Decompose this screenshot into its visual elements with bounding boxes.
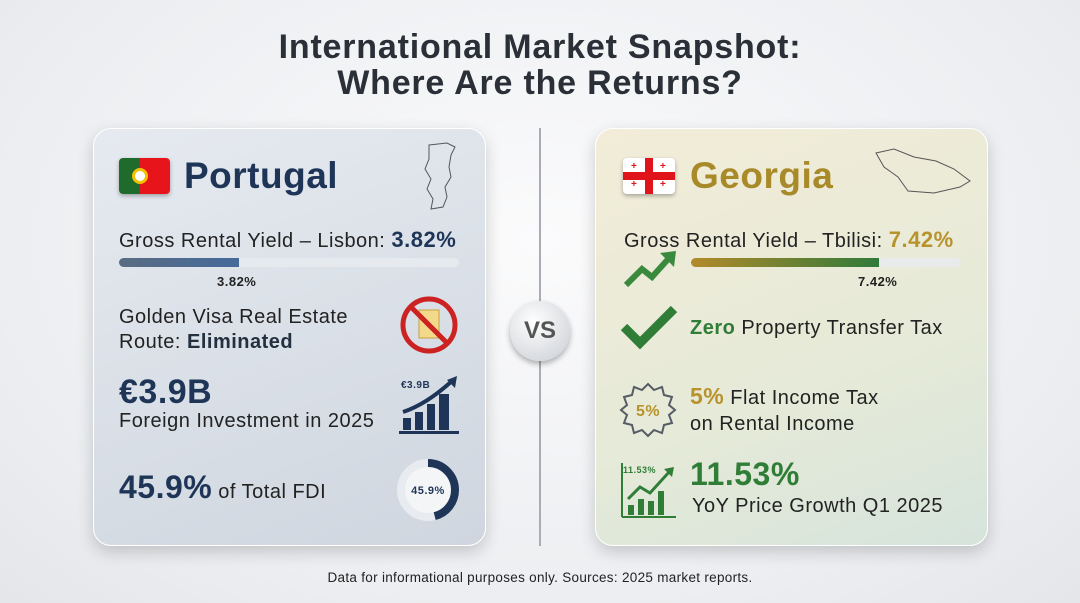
icon: growth chart xyxy=(621,463,676,518)
panel: portugal xyxy=(93,128,486,546)
text: 45.9% FDI: 45.9% of Total FDI xyxy=(119,469,326,505)
footer: Data for informational purposes only. Sources: 2025 market reports. xyxy=(327,570,753,585)
panel: georgia: YoY Price Growth Q1 2025 xyxy=(692,495,943,517)
chart: donut: 45.9% xyxy=(411,485,445,497)
icon: VS circle xyxy=(510,301,570,361)
text: price growth: 11.53% xyxy=(690,456,800,492)
icon: georgia flag: + xyxy=(631,179,637,190)
text: 3.9B: €3.9B xyxy=(119,373,212,411)
title: Where Are the Returns? xyxy=(337,64,743,102)
label: 7.42%: 7.42% xyxy=(858,274,897,289)
icon: check xyxy=(620,306,678,350)
text: rental yield: Gross Rental Yield – Lisbon: 3.82% xyxy=(119,227,456,252)
heading: Portugal: Portugal xyxy=(184,155,338,196)
panel: georgia xyxy=(595,128,988,546)
icon: georgia flag xyxy=(623,158,675,194)
icon: bar chart up xyxy=(399,376,459,434)
icon: 5% badge xyxy=(620,382,676,438)
text: rental yield: Gross Rental Yield – Tbilisi: 7.42% xyxy=(624,227,954,252)
text: flat tax xyxy=(690,383,879,435)
icon: VS circle: VS xyxy=(524,317,556,344)
icon: georgia flag: + xyxy=(660,161,666,172)
icon: portugal map xyxy=(424,142,456,210)
icon: bar chart up: €3.9B xyxy=(401,380,430,391)
text: golden visa: Route: Eliminated xyxy=(119,331,293,353)
bar: yield xyxy=(691,258,961,267)
text: flat tax: 5% Flat Income Tax xyxy=(690,383,879,409)
icon: 5% badge: 5% xyxy=(636,403,660,420)
title: International Market Snapshot: xyxy=(279,28,801,66)
icon: georgia flag: + xyxy=(660,179,666,190)
heading: Georgia: Georgia xyxy=(690,155,833,196)
text: flat tax: on Rental Income xyxy=(690,413,855,435)
panel: portugal: Foreign Investment in 2025 xyxy=(119,410,374,432)
icon: georgia flag: + xyxy=(631,161,637,172)
divider xyxy=(539,128,541,546)
icon: portugal flag xyxy=(119,158,170,194)
icon: growth chart: 11.53% xyxy=(623,465,656,475)
text: golden visa xyxy=(119,306,348,353)
text: golden visa: Golden Visa Real Estate xyxy=(119,306,348,328)
text: zero tax: Zero Property Transfer Tax xyxy=(690,317,943,339)
chart: donut xyxy=(397,459,459,521)
icon: trend arrow xyxy=(624,251,676,288)
bar: yield xyxy=(119,258,459,267)
icon: georgia map xyxy=(875,148,971,194)
title xyxy=(279,28,801,102)
label: 3.82%: 3.82% xyxy=(217,274,256,289)
icon: no visa xyxy=(400,296,458,354)
